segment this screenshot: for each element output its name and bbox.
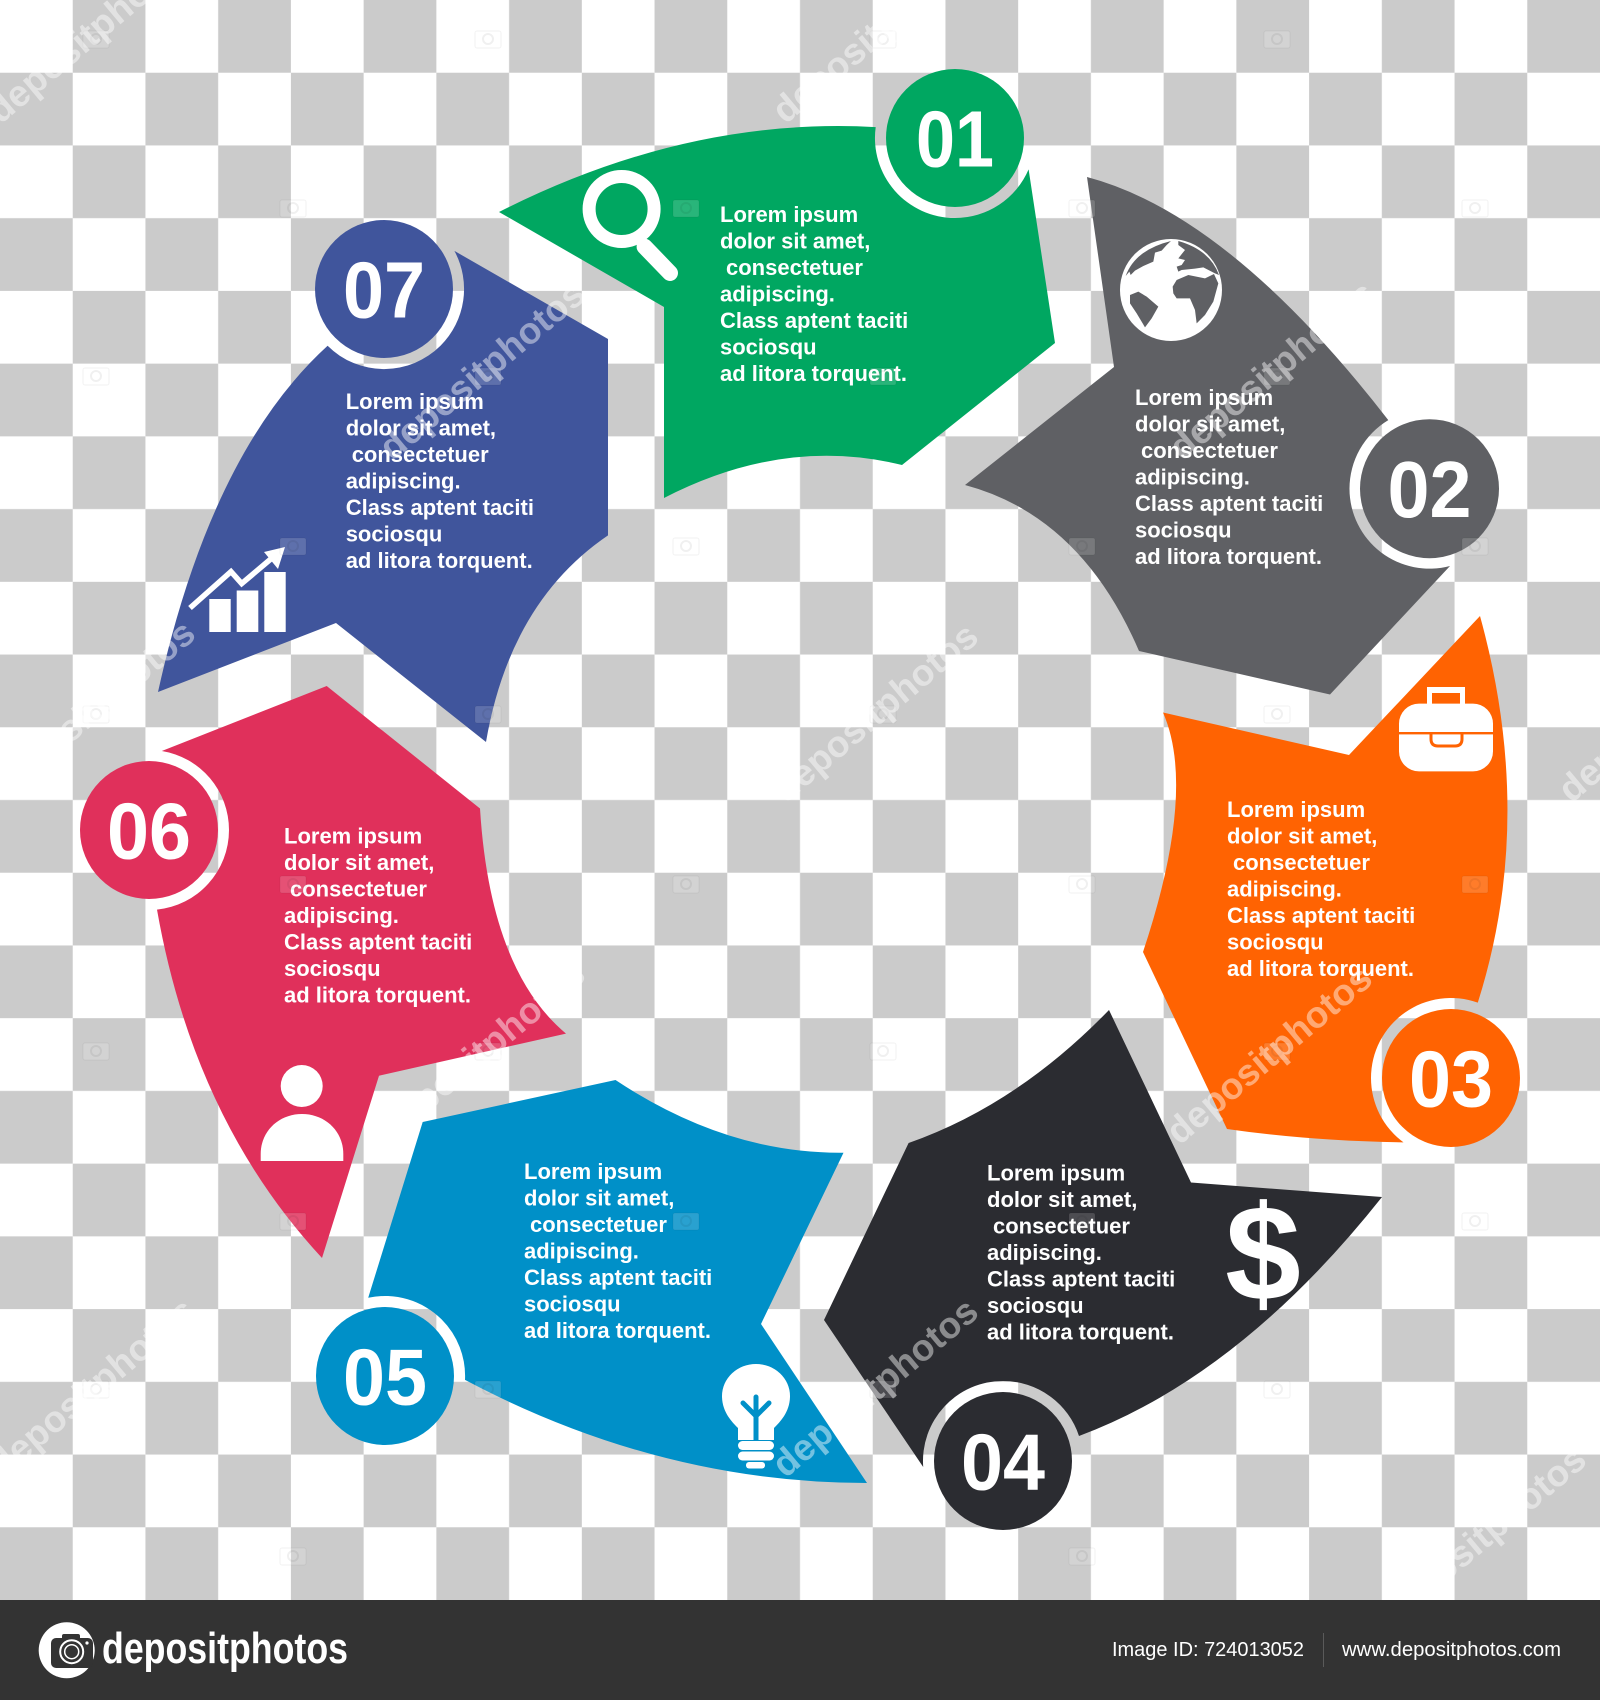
text block 02: dolor sit amet, [1135, 412, 1285, 436]
text block 05: adipiscing. [524, 1238, 639, 1264]
text block 07: sociosqu [346, 522, 442, 546]
watermark wordmarks: depositphotos [371, 273, 593, 468]
number 03: 03 [1409, 1034, 1493, 1124]
footer logo icon [39, 1622, 95, 1678]
text block 02: ad litora torquent. [1135, 544, 1322, 569]
footer logo wordmark: depositphotos [102, 1624, 348, 1673]
icon: light bulb [722, 1364, 790, 1468]
text block 03: adipiscing. [1227, 876, 1342, 902]
number 02: 02 [1388, 445, 1472, 534]
text block 07: Class aptent taciti [346, 495, 534, 520]
text block 07: dolor sit amet, [346, 416, 496, 440]
text block 04: consectetuer [993, 1214, 1130, 1238]
text block 07: consectetuer [352, 442, 489, 467]
panel: step 04 charcoal [824, 1010, 1382, 1530]
icon: dollar sign: $ [1225, 1177, 1301, 1329]
text block 05: sociosqu [524, 1292, 621, 1316]
panel: step 02 gray [965, 177, 1499, 694]
text block 02: Class aptent taciti [1135, 491, 1323, 516]
text block 05: consectetuer [530, 1212, 667, 1237]
watermark wordmarks: depositphotos [1158, 957, 1380, 1152]
text block 03: ad litora torquent. [1227, 956, 1414, 981]
panel: step 03 orange [1143, 616, 1520, 1147]
text block 03: sociosqu [1227, 930, 1324, 954]
number 05: 05 [343, 1332, 427, 1422]
text block 05: Class aptent taciti [524, 1265, 712, 1290]
panel: step 01 green [499, 69, 1055, 498]
number 06: 06 [107, 786, 191, 876]
text block 04: sociosqu [987, 1293, 1084, 1318]
text block 01: Class aptent taciti [720, 308, 908, 333]
text block 06: consectetuer [290, 876, 427, 902]
text block 01: adipiscing. [720, 282, 835, 306]
panel: step 07 navy [158, 220, 608, 742]
text block 04: Class aptent taciti [987, 1266, 1175, 1292]
text block 01: sociosqu [720, 334, 817, 360]
text block 07: adipiscing. [346, 468, 461, 494]
text block 04: Lorem ipsum [987, 1160, 1125, 1186]
text block 05: ad litora torquent. [524, 1318, 711, 1343]
watermark wordmarks: depositphotos [764, 615, 986, 810]
text block 04: adipiscing. [987, 1240, 1102, 1265]
text block 06: sociosqu [284, 956, 381, 981]
text block 06: Lorem ipsum [284, 824, 422, 848]
text block 06: Class aptent taciti [284, 930, 472, 954]
text block 07: ad litora torquent. [346, 548, 533, 573]
text block 03: consectetuer [1233, 850, 1370, 875]
text block 02: consectetuer [1141, 438, 1278, 463]
text block 01: ad litora torquent. [720, 361, 907, 386]
watermark camera marks [83, 31, 1488, 1565]
text block 06: adipiscing. [284, 903, 399, 928]
text block 03: Lorem ipsum [1227, 797, 1365, 822]
watermark wordmarks: depositphotos [764, 1290, 986, 1485]
text block 01: consectetuer [726, 255, 863, 280]
text block 01: dolor sit amet, [720, 228, 870, 254]
icon: globe [1120, 239, 1222, 341]
text block 02: sociosqu [1135, 518, 1232, 542]
watermark wordmarks: depositphotos [1372, 1438, 1594, 1633]
watermark wordmarks: depositphotos [371, 953, 593, 1148]
footer image id: Image ID: 724013052 [1112, 1639, 1304, 1661]
icon: rising bar chart [190, 547, 286, 632]
text block 07: Lorem ipsum [346, 389, 484, 414]
text block 04: dolor sit amet, [987, 1187, 1137, 1212]
footer site url: www.depositphotos.com [1341, 1639, 1561, 1661]
icon: magnifying glass [589, 176, 670, 273]
text block 05: dolor sit amet, [524, 1186, 674, 1210]
text block 03: Class aptent taciti [1227, 903, 1415, 928]
number 07: 07 [343, 246, 425, 334]
icon: person [261, 1065, 343, 1161]
text block 01: Lorem ipsum [720, 202, 858, 227]
text block 04: ad litora torquent. [987, 1320, 1174, 1344]
text block 03: dolor sit amet, [1227, 824, 1377, 848]
icon: briefcase [1399, 687, 1493, 771]
text block 05: Lorem ipsum [524, 1159, 662, 1184]
number 04: 04 [961, 1418, 1045, 1506]
text block 06: ad litora torquent. [284, 982, 471, 1008]
text block 06: dolor sit amet, [284, 850, 434, 875]
number 01: 01 [916, 94, 994, 184]
watermark wordmarks: depositphotos [1161, 273, 1383, 468]
footer bar [0, 1600, 1600, 1700]
text block 02: Lorem ipsum [1135, 385, 1273, 410]
text block 02: adipiscing. [1135, 464, 1250, 490]
panel: step 06 crimson [80, 686, 566, 1258]
panel: step 05 blue [316, 1080, 867, 1483]
